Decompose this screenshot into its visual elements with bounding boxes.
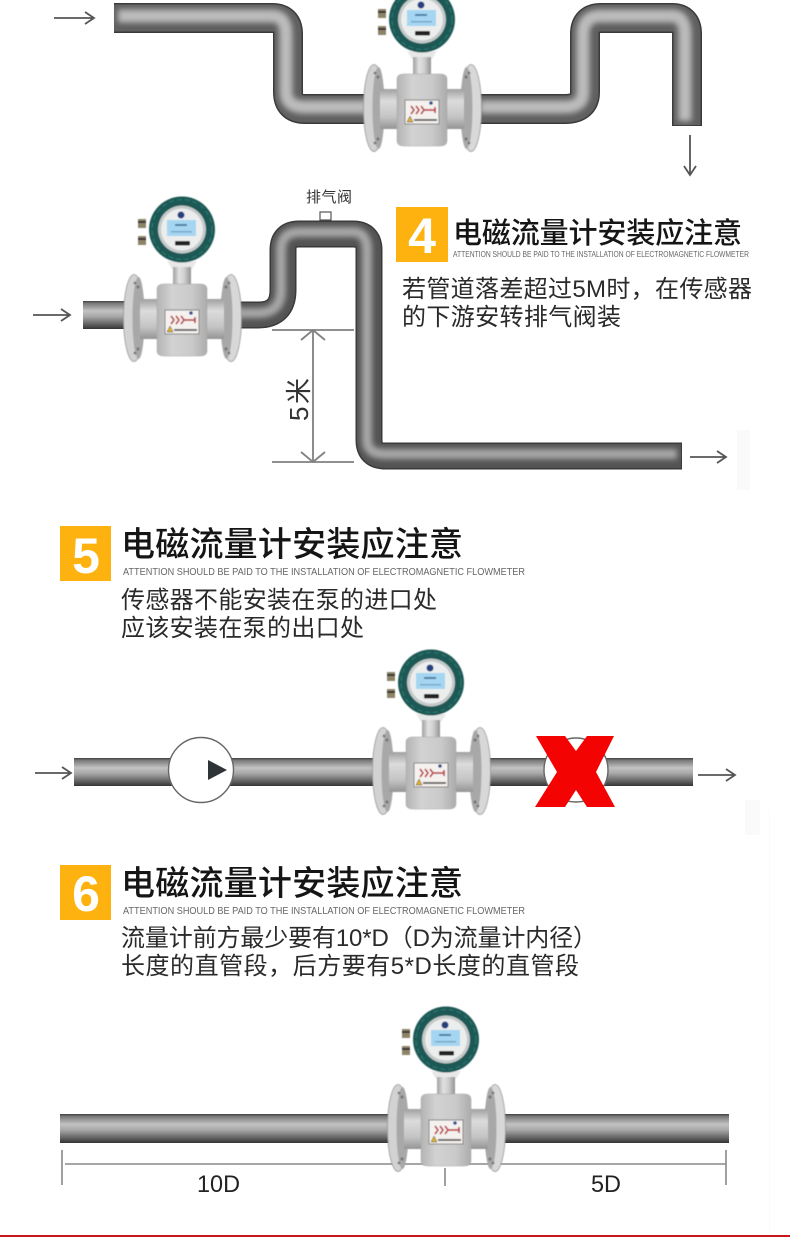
faint background artefacts — [737, 430, 770, 1235]
heading block: section 6: 长度的直管段，后方要有5*D长度的直管段 — [121, 953, 579, 980]
vent valve label: 排气阀 — [306, 189, 352, 206]
title: 电磁流量计安装应注意 — [121, 526, 463, 564]
title: 电磁流量计安装应注意 — [453, 217, 742, 250]
arrow: section 4 inlet — [33, 309, 70, 321]
heading block: section 4: 4 — [408, 208, 436, 264]
diagram: section 5 pump layout — [35, 650, 735, 814]
body text: 若管道落差超过5M时，在传感器 — [402, 276, 752, 303]
pipe: straight run — [74, 758, 693, 786]
heading block: section 4: 的下游安转排气阀装 — [402, 304, 621, 331]
body text: 流量计前方最少要有10*D（D为流量计内径） — [121, 925, 597, 952]
heading block: section 6 — [60, 865, 597, 980]
pipe: left inlet — [83, 301, 133, 329]
diagram: top pipe with meter — [54, 0, 696, 175]
icon: pump — [168, 738, 234, 802]
number badge 5 — [60, 526, 111, 581]
meter: section 4 — [124, 196, 242, 362]
arrow: section 5 outlet — [698, 769, 735, 781]
pipe: straight run — [60, 1114, 729, 1143]
subtitle: ATTENTION SHOULD BE PAID TO THE INSTALLATION OF ELECTROMAGNETIC FLOWMETER — [123, 567, 525, 578]
meter: section 6 — [388, 1006, 506, 1172]
number badge 4 — [396, 207, 448, 262]
subtitle: ATTENTION SHOULD BE PAID TO THE INSTALLATION OF ELECTROMAGNETIC FLOWMETER — [123, 906, 525, 917]
dimension lines — [62, 1150, 726, 1186]
arrow: section 5 inlet — [35, 767, 71, 779]
diagram: section 6 straight run — [60, 1006, 729, 1198]
heading block: section 5 — [60, 526, 525, 642]
arrow: inlet — [54, 12, 94, 24]
title: 电磁流量计安装应注意 — [121, 865, 463, 903]
number badge 6 — [60, 865, 111, 920]
pipe: riser and drop — [235, 232, 682, 456]
label: 10D: 10D — [197, 1171, 240, 1198]
meter: top — [364, 0, 482, 152]
wrong pump position with red cross — [535, 736, 615, 807]
body text: 传感器不能安装在泵的进口处 — [121, 587, 437, 614]
pipe: U-shaped run — [114, 16, 687, 126]
arrow: section 4 outlet — [690, 451, 726, 463]
dimension: 5 metres: 5米 — [284, 378, 314, 421]
label: 5D: 5D — [591, 1171, 621, 1198]
bottom red rule — [0, 1235, 790, 1237]
heading block: section 5: 应该安装在泵的出口处 — [121, 615, 364, 642]
arrow: outlet down — [684, 135, 696, 175]
heading block: section 5: 5 — [72, 528, 100, 584]
meter: section 5 — [372, 650, 490, 814]
vent valve — [320, 212, 331, 220]
diagram: section 4 vent valve layout — [33, 189, 726, 463]
heading block: section 4 — [396, 207, 752, 331]
heading block: section 6: 6 — [72, 866, 100, 922]
dimension: 5 metres — [272, 330, 354, 462]
